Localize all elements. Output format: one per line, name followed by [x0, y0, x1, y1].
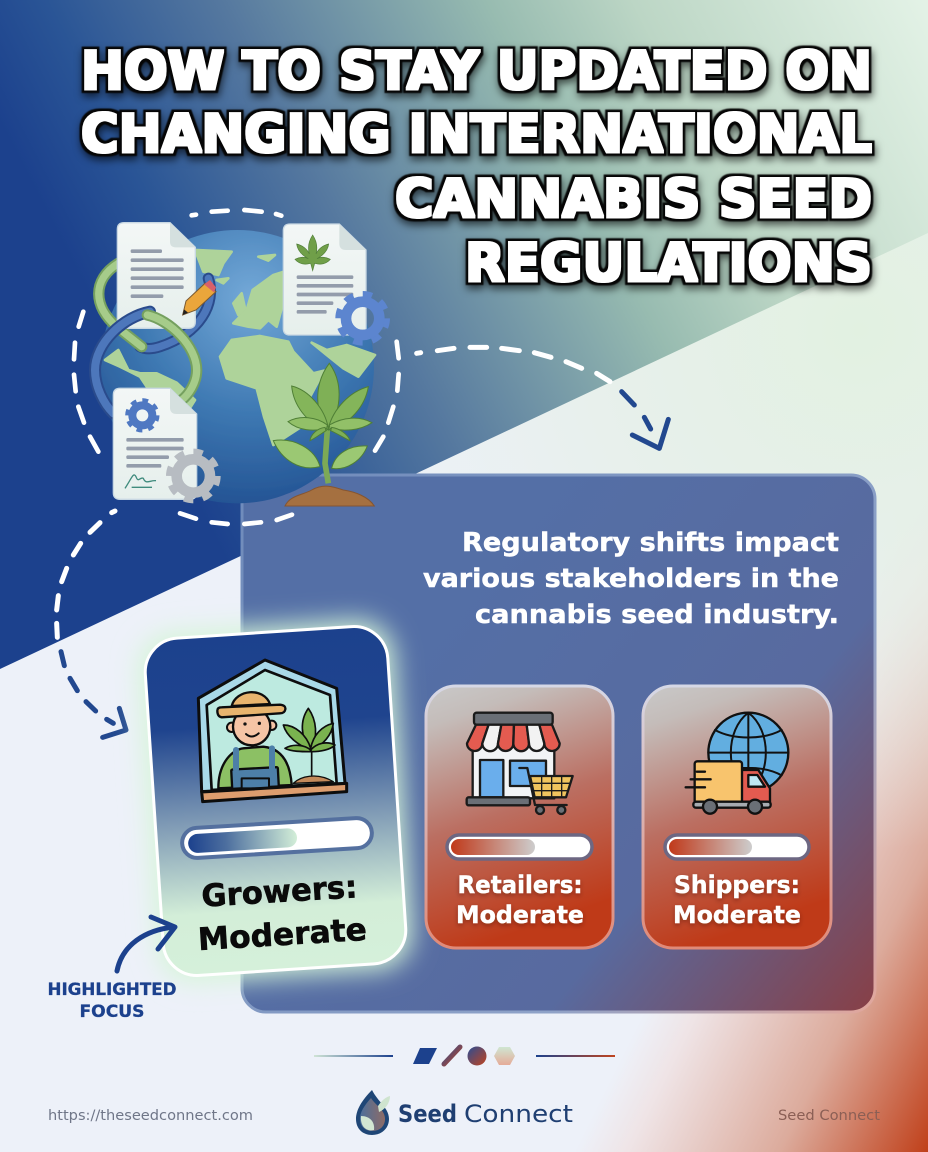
- panel intro text: [423, 528, 839, 630]
- progress bar: [447, 835, 592, 859]
- title: HOW TO STAY UPDATED ON: [81, 41, 872, 102]
- arrow: highlighted focus: [117, 917, 175, 971]
- icon: front chain link: [95, 312, 197, 413]
- title: CHANGING INTERNATIONAL: [81, 104, 872, 165]
- icon: document with cannabis leaf and gear: [283, 224, 387, 342]
- icon: document with pencil: [117, 223, 216, 328]
- title: CANNABIS SEED: [395, 169, 872, 230]
- logo: seed connect: [356, 1090, 573, 1135]
- label: retailers: Moderate: [456, 901, 584, 929]
- label: shippers: Moderate: [673, 901, 801, 929]
- background: upper diagonal blue-to-green gradient: [0, 0, 928, 669]
- panel intro text: Regulatory shifts impact: [462, 528, 839, 558]
- icon: document with signature and gears: [113, 388, 217, 500]
- icon: farmer in greenhouse: [198, 660, 347, 802]
- icon: seed logo: [356, 1090, 390, 1135]
- icon: globe and delivery truck: [686, 713, 788, 814]
- callout: highlighted focus: HIGHLIGHTED: [48, 980, 176, 999]
- label: shippers: [673, 871, 801, 929]
- decorative shapes divider: [314, 1046, 615, 1066]
- callout: highlighted focus: FOCUS: [80, 1002, 144, 1021]
- arrow: globe to panel: [417, 347, 668, 448]
- background: pale green wash: [300, 220, 928, 1000]
- label: shippers: Shippers:: [674, 871, 800, 899]
- progress bar: [181, 817, 373, 859]
- icon: back chain link: [99, 263, 210, 349]
- footer brand: Seed Connect: [778, 1108, 881, 1124]
- title: REGULATIONS: [465, 233, 872, 294]
- progress bar: [665, 835, 809, 859]
- icon: storefront with cart: [467, 713, 573, 814]
- arrow: globe to growers card: [57, 511, 126, 737]
- icon: cannabis seedling: [273, 363, 374, 506]
- panel intro text: cannabis seed industry.: [475, 600, 839, 630]
- title: [81, 41, 872, 294]
- logo: seed connect: Seed: [398, 1100, 457, 1128]
- label: retailers: [456, 871, 584, 929]
- label: growers: Growers:: [200, 869, 358, 915]
- card: growers: [143, 624, 408, 978]
- footer url: https://theseedconnect.com: [48, 1108, 253, 1124]
- panel: stakeholders: [242, 475, 875, 1012]
- label: retailers: Retailers:: [458, 871, 582, 899]
- panel intro text: various stakeholders in the: [423, 564, 839, 594]
- card: growers glow: [137, 618, 414, 984]
- label: growers: Moderate: [197, 912, 368, 958]
- card: retailers: [426, 686, 613, 948]
- logo: seed connect: Connect: [464, 1100, 573, 1128]
- dashed ring: [74, 210, 399, 524]
- card: shippers: [643, 686, 831, 948]
- callout: highlighted focus: [48, 980, 176, 1021]
- label: growers: [197, 869, 368, 958]
- globe: [101, 230, 375, 503]
- globe illustration: [74, 210, 399, 524]
